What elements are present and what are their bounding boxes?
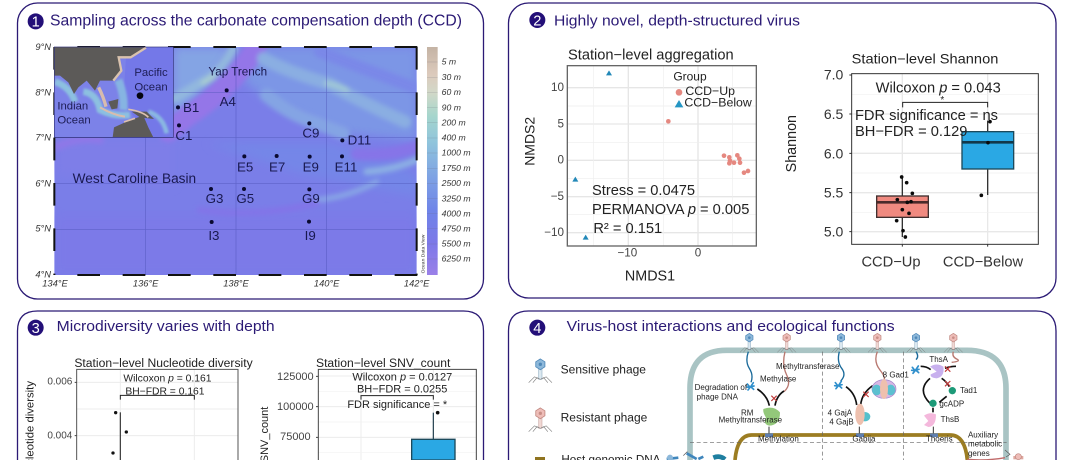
map axes: 9°N <box>35 42 51 52</box>
map axes: 7°N <box>35 133 51 143</box>
NMDS scatter plot: −10 <box>544 226 565 239</box>
depth colour bar: 400 m <box>442 133 466 143</box>
map labels and stations: C9 <box>302 125 319 140</box>
heading number 4: 4 <box>533 321 541 337</box>
heading: microdiversity: Microdiversity varies with depth <box>57 319 275 335</box>
map labels and stations: C1 <box>175 128 192 143</box>
NMDS scatter plot: Group <box>673 70 707 84</box>
map labels and stations: A4 <box>220 94 237 109</box>
NMDS scatter plot: 0 <box>558 154 565 167</box>
NMDS scatter plot: R² = 0.151 <box>593 221 662 237</box>
NMDS scatter plot <box>521 48 756 285</box>
NMDS scatter plot: −10 <box>617 247 638 260</box>
heading number 1: 1 <box>32 15 40 31</box>
SNV count plot: FDR significance = * <box>347 399 448 411</box>
NMDS scatter plot: CCD−Below <box>684 96 752 110</box>
SNV count plot: Wilcoxon p = 0.0127 <box>352 371 452 383</box>
map labels and stations: I9 <box>305 228 316 243</box>
depth colour bar: 90 m <box>442 102 461 112</box>
SNV count plot: 100000 <box>277 401 314 413</box>
host cell diagram: 4 GajB <box>829 417 854 426</box>
depth colour bar: 5 m <box>442 57 456 67</box>
map labels and stations: I3 <box>208 228 219 243</box>
map axes: 4°N <box>35 269 51 279</box>
NMDS scatter plot: NMDS1 <box>625 269 675 285</box>
heading number 2 <box>529 12 545 29</box>
host cell diagram: ThsA <box>929 355 949 364</box>
Shannon box plot: Wilcoxon p = 0.043 <box>876 80 1001 96</box>
depth colour bar: 6250 m <box>442 254 471 264</box>
nucleotide diversity plot <box>24 356 253 460</box>
heading number 4 <box>529 320 545 337</box>
host cell diagram: Methyltransferase <box>719 416 783 425</box>
host cell diagram: RM <box>741 409 753 418</box>
NMDS scatter plot: 0 <box>695 247 702 260</box>
map labels and stations: D11 <box>348 132 371 147</box>
Shannon box plot: 5.0 <box>824 224 844 240</box>
depth colour bar: 30 m <box>442 72 461 82</box>
host cell diagram: Auxiliary <box>968 431 998 440</box>
host cell diagram: genes <box>968 449 990 458</box>
depth colour bar: 2500 m <box>441 178 471 188</box>
host cell diagram: Gabija <box>852 435 876 444</box>
depth colour bar: 60 m <box>442 87 461 97</box>
host cell diagram: 8 Gad1 <box>883 370 909 379</box>
host cell diagram: Methylation <box>758 435 799 444</box>
legend: resistant phage <box>529 408 648 432</box>
depth colour bar: 200 m <box>441 118 466 128</box>
legend: resistant phage: Resistant phage <box>561 411 648 425</box>
SNV count plot: Station−level SNV_count <box>316 356 451 370</box>
NMDS scatter plot: CCD−Up <box>685 84 735 98</box>
host cell diagram: Thoeris <box>926 435 953 444</box>
Shannon box plot: * <box>940 95 944 106</box>
legend: sensitive phage: Sensitive phage <box>561 362 646 376</box>
map axes: 140°E <box>314 279 340 289</box>
NMDS scatter plot: 10 <box>551 81 565 94</box>
Shannon box plot: CCD−Below <box>943 255 1024 271</box>
map axes <box>35 42 430 289</box>
host cell diagram: metabolic <box>968 440 1002 449</box>
NMDS scatter plot: PERMANOVA p = 0.005 <box>592 202 749 218</box>
host cell diagram: phage DNA <box>697 392 739 401</box>
SNV count plot: 75000 <box>280 431 311 443</box>
depth colour bar: 1750 m <box>442 163 471 173</box>
Shannon box plot: FDR significance = ns <box>855 108 998 124</box>
Shannon box plot: Station−level Shannon <box>852 51 998 67</box>
nucleotide diversity plot: 0.006 <box>47 377 73 388</box>
map labels and stations: West Caroline Basin <box>73 171 196 186</box>
panel: microdiversity <box>18 311 484 460</box>
SNV count plot <box>259 356 476 460</box>
map labels and stations: E11 <box>335 160 357 175</box>
Shannon box plot <box>784 51 1038 271</box>
host cell diagram: Tad1 <box>960 386 978 395</box>
map labels and stations: E5 <box>237 160 253 175</box>
nucleotide diversity plot: Station−level Nucleotide diversity <box>74 356 253 370</box>
map axes: 5°N <box>35 224 51 234</box>
map axes: 134°E <box>42 279 69 289</box>
inset map: Ocean <box>134 81 168 93</box>
host cell diagram <box>667 333 1023 460</box>
legend: sensitive phage <box>529 359 646 383</box>
map axes: 8°N <box>35 87 51 97</box>
NMDS scatter plot: NMDS2 <box>521 117 537 166</box>
depth colour bar: 4000 m <box>442 208 471 218</box>
SNV count plot: BH−FDR = 0.0255 <box>357 383 447 395</box>
host cell diagram: Methyltransferase <box>776 362 840 371</box>
panel: virus-host interactions <box>508 311 1056 460</box>
Shannon box plot: 6.5 <box>824 106 844 122</box>
heading: sampling: Sampling across the carbonate compensation depth (CCD) <box>50 12 462 29</box>
Shannon box plot: CCD−Up <box>861 255 921 271</box>
map labels and stations: G3 <box>206 191 223 206</box>
host cell diagram: gcADP <box>939 399 964 408</box>
nucleotide diversity plot: Wilcoxon p = 0.161 <box>123 374 212 385</box>
Shannon box plot: 6.0 <box>824 145 844 161</box>
map labels and stations: B1 <box>183 100 199 115</box>
Shannon box plot: BH−FDR = 0.129 <box>855 124 967 140</box>
heading: novel virus: Highly novel, depth-structured virus <box>554 13 800 29</box>
inset map: Indian <box>57 100 88 112</box>
panel: novel virus <box>508 3 1056 298</box>
depth colour bar: 5500 m <box>442 239 471 249</box>
map axes: 6°N <box>35 178 51 188</box>
host cell diagram: Methylase <box>760 375 797 384</box>
heading number 3 <box>28 320 44 337</box>
NMDS scatter plot: 5 <box>558 117 564 130</box>
Shannon box plot: Shannon <box>784 115 800 172</box>
heading number 2: 2 <box>533 13 541 29</box>
nucleotide diversity plot: 0.004 <box>47 431 73 442</box>
map labels and stations: E9 <box>303 160 319 175</box>
NMDS scatter plot: Station−level aggregation <box>568 48 734 64</box>
inset map: Pacific <box>134 67 168 79</box>
panel: sampling map <box>18 3 484 299</box>
Shannon box plot: 5.5 <box>824 185 844 201</box>
NMDS scatter plot: Stress = 0.0475 <box>592 183 695 199</box>
heading number 1 <box>28 13 44 31</box>
bathymetric map <box>35 42 430 289</box>
inset map: Ocean <box>57 115 91 127</box>
host cell diagram: Degradation of <box>695 383 748 392</box>
depth colour bar: 4750 m <box>442 223 471 233</box>
map axes: 142°E <box>404 279 430 289</box>
heading: interactions: Virus-host interactions and ecological functions <box>567 319 895 335</box>
map axes: 136°E <box>133 279 159 289</box>
depth colour bar: 1000 m <box>442 148 471 158</box>
NMDS scatter plot: −5 <box>551 190 564 203</box>
depth colour bar <box>421 47 471 275</box>
host cell diagram: ThsB <box>941 415 959 424</box>
map labels and stations <box>73 65 371 243</box>
depth colour bar: Ocean Data View <box>421 234 427 273</box>
map labels and stations: E7 <box>269 160 285 175</box>
map labels and stations: Yap Trench <box>208 65 267 78</box>
heading number 3: 3 <box>32 321 40 337</box>
host cell diagram: 4 GajA <box>828 408 853 417</box>
map labels and stations: G9 <box>302 191 320 206</box>
depth colour bar: 3250 m <box>442 193 471 203</box>
map labels and stations: G5 <box>236 191 254 206</box>
Shannon box plot: 7.0 <box>824 67 844 83</box>
map axes: 138°E <box>223 279 250 289</box>
inset map <box>54 47 173 137</box>
SNV count plot: 125000 <box>277 371 314 383</box>
nucleotide diversity plot: BH−FDR = 0.161 <box>125 386 205 397</box>
